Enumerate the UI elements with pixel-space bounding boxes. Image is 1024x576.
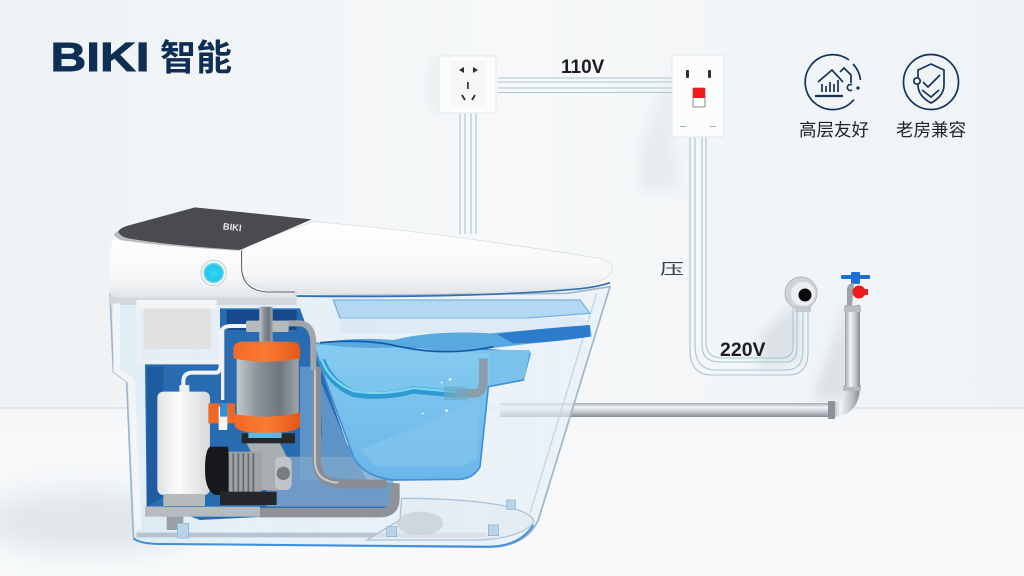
orange clamp: [208, 403, 235, 423]
right grey riser: [457, 358, 483, 393]
upper white tray: [138, 302, 220, 362]
valve: [841, 272, 870, 306]
water bubbles: [422, 378, 451, 414]
center fitting: [246, 321, 289, 332]
wall drain outlet: [785, 277, 817, 312]
panel logo: BIKI: [222, 221, 242, 233]
brand logo: BIKI: [50, 34, 150, 80]
socket: five-hole 110V: [439, 56, 496, 113]
caption: old house compatible: 老房兼容: [896, 120, 966, 140]
white chase: [117, 303, 138, 530]
icon: shield: [904, 54, 958, 110]
wires: 110V horizontal: [498, 78, 672, 92]
white cylinder: [157, 392, 210, 495]
small white tube: [183, 326, 250, 390]
label: 110V: 110V: [561, 57, 605, 78]
seam: [242, 251, 295, 292]
seat base / bowl: [367, 498, 534, 540]
wall shadows of sockets and pipes: [434, 60, 850, 400]
floor shadow: [0, 492, 200, 552]
wires: left socket down: [460, 112, 476, 234]
filter cylinder: [237, 350, 299, 423]
upper tank rim: [333, 300, 590, 318]
caption: high-rise friendly: 高层友好: [799, 120, 869, 140]
indicator button: [201, 260, 226, 286]
light blue hose: [322, 360, 457, 395]
dark panel: [118, 207, 312, 250]
tank water: [313, 343, 530, 480]
brand logo: 智能: [160, 37, 232, 78]
pump: [242, 433, 295, 443]
wall background: [0, 0, 1024, 408]
tank housing: [109, 232, 295, 297]
lid blue rim: [297, 283, 610, 296]
drain pipe steel: [317, 367, 387, 484]
grey box: [144, 308, 211, 349]
frame ledge: [110, 293, 297, 305]
floor: [0, 408, 1024, 576]
body inner edge: [530, 293, 597, 513]
base screw posts: [177, 500, 515, 538]
main pipe: [500, 305, 861, 419]
wires: 220V loop: [690, 136, 808, 375]
clear body: [110, 287, 610, 547]
toilet cutaway: [109, 207, 612, 547]
blue compartment backing: [145, 308, 397, 520]
water surface: [317, 325, 592, 351]
label: pressure glyph: 压: [660, 261, 684, 278]
icon: high-rise: [805, 55, 860, 110]
label: 220V: 220V: [720, 339, 766, 361]
lower frame: [145, 507, 260, 517]
base rim: [133, 525, 533, 547]
seat lid: [242, 222, 612, 294]
floor line: [0, 407, 1024, 409]
socket: breaker 220V: [672, 55, 724, 137]
brand logo: [50, 34, 232, 80]
